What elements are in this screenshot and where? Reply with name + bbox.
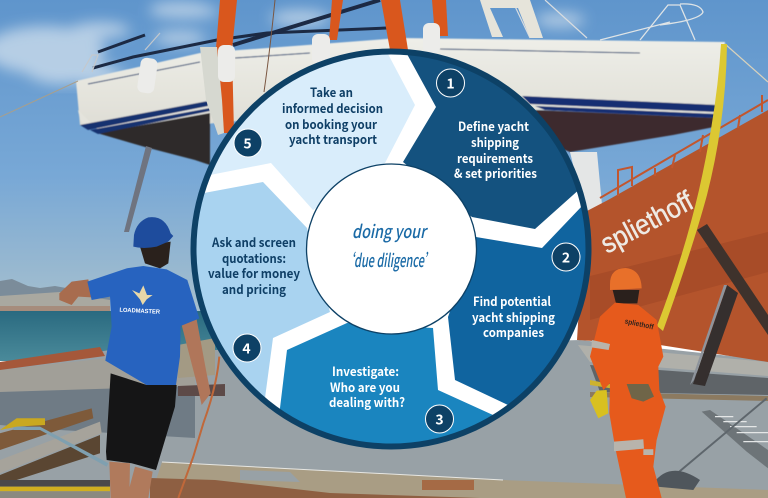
star — [132, 285, 153, 305]
ship name: spliethoff — [595, 185, 698, 259]
coverall — [590, 303, 666, 498]
yacht hull — [76, 38, 725, 165]
yellow strap roll — [590, 390, 608, 418]
fenders — [137, 23, 440, 135]
step 1 text — [454, 116, 537, 182]
badge 2: 2 — [562, 248, 570, 268]
support beam — [690, 224, 768, 386]
segment 5 — [211, 54, 415, 210]
right arm — [182, 319, 211, 405]
step 5 text: on booking your — [285, 114, 377, 133]
orange helmet — [610, 268, 642, 290]
crane structure — [480, 0, 602, 215]
step 4 text: quotations: — [222, 248, 286, 267]
step 2 text: companies — [483, 322, 544, 341]
step 3 text: Investigate: — [332, 361, 399, 380]
segment 2 — [448, 207, 586, 405]
wheel base — [193, 51, 589, 447]
step 4 text: and pricing — [222, 279, 286, 298]
badge 5: 5 — [243, 134, 252, 154]
head — [140, 242, 171, 268]
outer ring — [194, 52, 588, 446]
man in blue shirt — [59, 217, 219, 498]
step 1 text: & set priorities — [454, 163, 537, 182]
badge 5 — [234, 129, 262, 157]
rope — [178, 357, 219, 498]
center circle — [306, 164, 476, 334]
badge 4: 4 — [242, 338, 251, 358]
step 1 text: shipping — [471, 132, 519, 151]
legs — [109, 462, 153, 498]
back print: spliethoff — [624, 316, 655, 331]
badge 1 — [436, 69, 464, 97]
ladder — [653, 398, 768, 490]
sea and shore — [0, 279, 240, 361]
segment 4 — [196, 182, 330, 398]
step 1 text: Define yacht — [458, 116, 530, 135]
badge 4 — [233, 334, 261, 362]
step 3 text: Who are you — [330, 377, 400, 396]
step 2 text: Find potential — [473, 291, 551, 310]
step 5 text — [282, 82, 383, 148]
head — [613, 290, 639, 303]
step 4 text: Ask and screen — [211, 232, 296, 251]
orange lifting straps — [216, 0, 448, 133]
shorts — [106, 373, 177, 470]
process wheel — [190, 48, 592, 450]
man in orange suit — [590, 268, 666, 498]
sky — [0, 0, 768, 320]
step 1 text: requirements — [457, 148, 533, 167]
step 2 text — [472, 291, 555, 341]
pocket item — [627, 384, 654, 402]
yellow strap — [657, 44, 727, 331]
deck — [0, 338, 768, 498]
blue helmet — [133, 217, 173, 248]
step 3 text — [329, 361, 405, 411]
t-shirt — [87, 266, 199, 385]
badge 2 — [552, 243, 580, 271]
center text — [343, 218, 435, 273]
keel fin — [124, 146, 152, 232]
ship hull — [577, 110, 768, 362]
segment 3 — [280, 323, 493, 444]
segments — [196, 54, 586, 444]
step 4 text — [208, 232, 300, 298]
step 5 text: informed decision — [282, 98, 383, 117]
left arm — [59, 279, 92, 305]
badge 3: 3 — [435, 410, 444, 430]
center text: doing your — [352, 218, 428, 244]
shirt logo: LOADMASTER — [119, 308, 161, 316]
badge 1: 1 — [446, 74, 455, 94]
segment 1 — [403, 55, 577, 229]
ship hull shading — [590, 232, 768, 320]
reflective strips — [591, 340, 653, 455]
step 5 text: Take an — [310, 82, 353, 101]
wood pile — [0, 408, 110, 498]
center text: ‘due diligence’ — [343, 247, 435, 273]
badge 3 — [426, 405, 454, 433]
rigging and lines — [0, 0, 768, 117]
step 2 text: yacht shipping — [472, 307, 555, 326]
step 4 text: value for money — [208, 263, 300, 282]
step 5 text: yacht transport — [289, 129, 378, 148]
step 3 text: dealing with? — [329, 392, 405, 411]
clouds — [0, 2, 585, 85]
ship railing — [600, 95, 768, 198]
